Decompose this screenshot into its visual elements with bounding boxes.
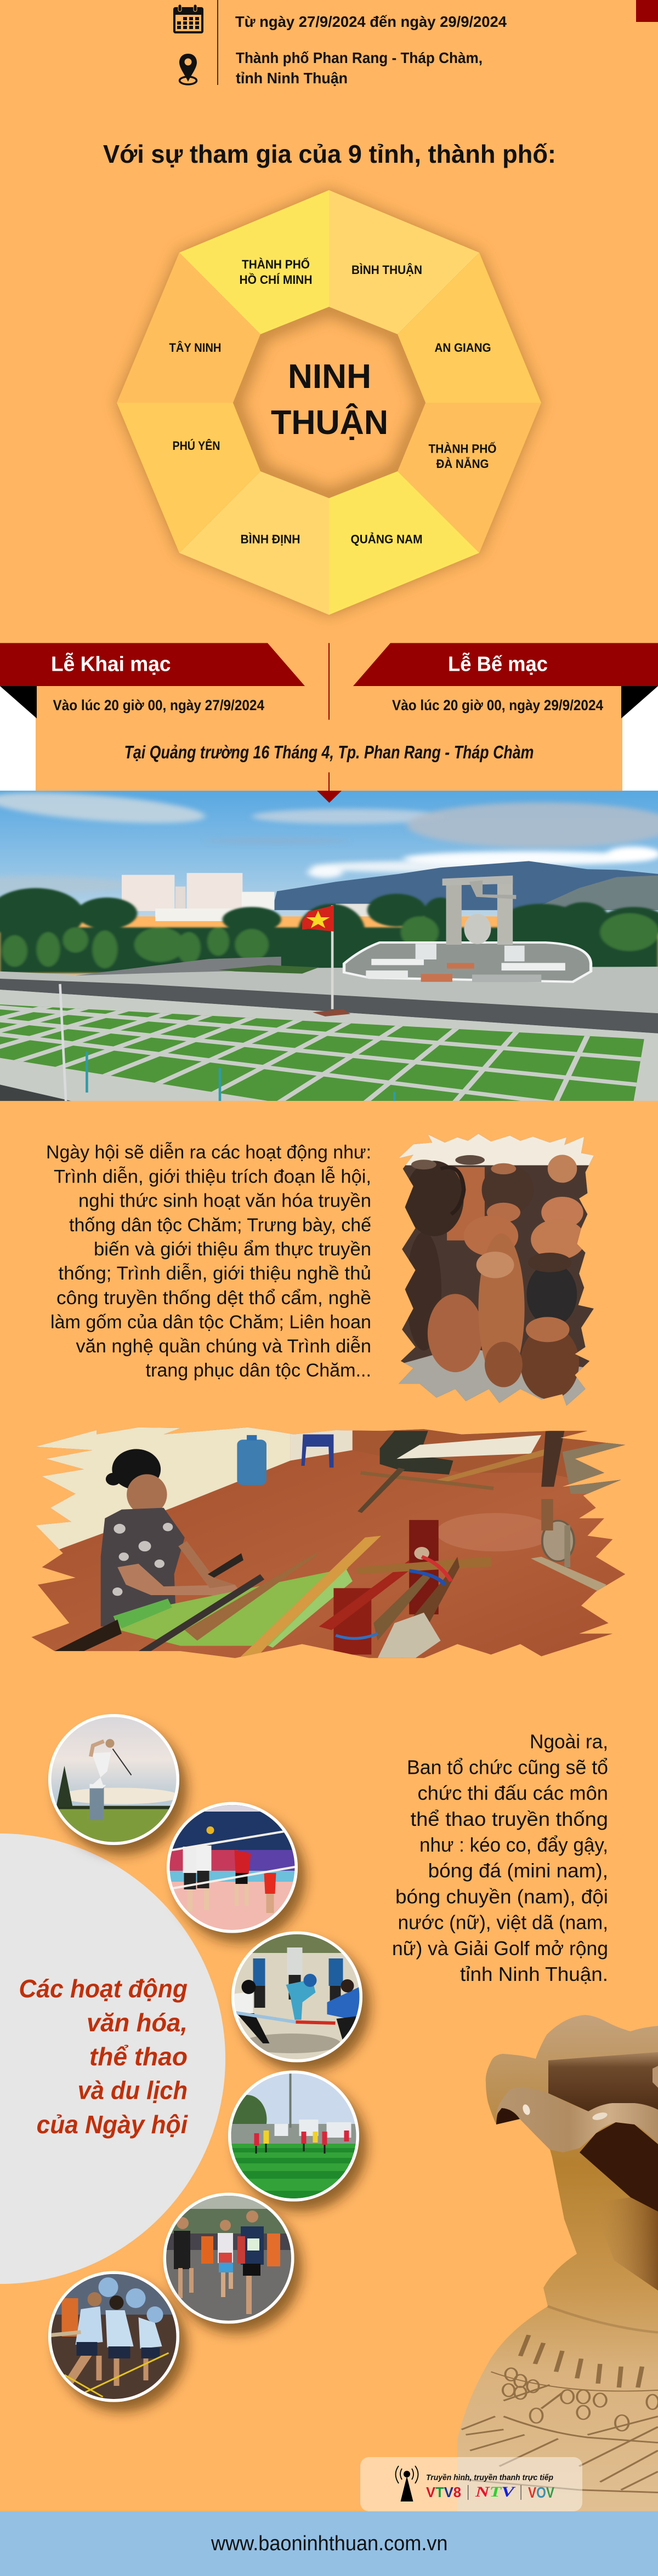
- banner: closing ceremony: Lễ Bế mạc: [448, 652, 548, 676]
- text: festival activities: biến và giới thiệu ẩm thực truyền: [94, 1239, 371, 1260]
- text: sports: thể thao truyền thống: [410, 1808, 608, 1830]
- text: festival activities: [46, 1142, 371, 1381]
- footer: www.baoninhthuan.com.vn: [211, 2532, 447, 2555]
- circle photo: golf: [48, 1714, 180, 1848]
- text: sports: Ban tổ chức cũng sẽ tổ: [407, 1756, 608, 1779]
- woman: [101, 1449, 248, 1626]
- grey circle backdrop: [0, 1834, 225, 2284]
- circle photo: pushing stick: [231, 1931, 363, 2063]
- opening time: Vào lúc 20 giờ 00, ngày 27/9/2024: [53, 697, 264, 713]
- text: festival activities: văn nghệ quần chúng và Trình diễn: [76, 1336, 371, 1357]
- segment: Thành phố Hồ Chí Minh: THÀNH PHỐ: [242, 257, 310, 271]
- spinning wheel: [531, 1499, 606, 1592]
- segment: Quảng Nam: QUẢNG NAM: [351, 533, 422, 546]
- segment: Đà Nẵng: THÀNH PHỐ: [429, 442, 497, 456]
- divider: [217, 0, 218, 85]
- text: festival activities: Ngày hội sẽ diễn ra các hoạt động như:: [46, 1142, 371, 1163]
- photo: Cham pottery: [394, 1130, 596, 1410]
- broadcast panel: [360, 2457, 582, 2511]
- heading: activities: Các hoạt động: [19, 1974, 188, 2003]
- place text: tỉnh Ninh Thuận: [236, 70, 348, 87]
- footer: [0, 2511, 658, 2576]
- text: sports: [392, 1730, 608, 1985]
- segment: An Giang: [398, 253, 541, 403]
- heading: activities: thể thao: [89, 2042, 188, 2071]
- segment: Bình Thuận: [329, 190, 479, 334]
- jar body: [457, 2015, 658, 2511]
- segment: Phú Yên: PHÚ YÊN: [172, 439, 220, 453]
- segment: Tây Ninh: [117, 253, 260, 403]
- background weaver and loom: [358, 1431, 629, 1513]
- clay jar image: [457, 2015, 658, 2511]
- circle photo: football: [227, 2070, 360, 2204]
- centre: Ninh Thuận: THUẬN: [271, 404, 388, 442]
- broadcast text: Truyền hình, truyền thanh trực tiếp: [426, 2474, 553, 2482]
- orange panel: [36, 686, 622, 791]
- segment: Bình Định: BÌNH ĐỊNH: [240, 533, 300, 546]
- text: festival activities: trang phục dân tộc Chăm...: [146, 1360, 371, 1381]
- text: sports: bóng chuyền (nam), đội: [395, 1885, 608, 1908]
- heading: activities: và du lịch: [78, 2076, 188, 2105]
- closing time: Vào lúc 20 giờ 00, ngày 29/9/2024: [392, 697, 603, 713]
- header: date and place: [173, 0, 507, 87]
- arrow down: [317, 773, 342, 803]
- segment: Tây Ninh: TÂY NINH: [169, 341, 222, 355]
- jar mouth interior: [548, 2052, 658, 2111]
- white side strips: [0, 686, 658, 791]
- text: sports: bóng đá (mini nam),: [428, 1859, 608, 1882]
- segment: Đà Nẵng: [398, 403, 541, 553]
- circle photo: volleyball: [167, 1802, 298, 1934]
- octagon diagram: [117, 190, 541, 615]
- jar engraved pattern: [462, 2306, 658, 2493]
- icon: calendar: [173, 4, 203, 33]
- monument: [344, 876, 591, 982]
- text: festival activities: thống; Trình diễn, giới thiệu nghề thủ: [58, 1263, 371, 1284]
- circle photo: tug of war: [48, 2271, 180, 2402]
- icon: antenna: [396, 2466, 418, 2501]
- photo: square with monument and flag: [0, 790, 658, 1101]
- logo: VOV: VOV: [528, 2484, 554, 2501]
- segment: Quảng Nam: [329, 471, 479, 615]
- segment: Bình Thuận: BÌNH THUẬN: [351, 263, 422, 277]
- text: festival activities: nghi thức sinh hoạt văn hóa truyền: [78, 1190, 371, 1211]
- logo: VTV8: VTV8: [426, 2484, 461, 2500]
- place text: Thành phố Phan Rang - Tháp Chàm,: [236, 49, 483, 66]
- circle photo: running: [163, 2192, 294, 2327]
- text: festival activities: Trình diễn, giới thiệu trích đoạn lễ hội,: [54, 1166, 371, 1187]
- banner: opening ceremony: Lễ Khai mạc: [51, 652, 171, 676]
- segment: Đà Nẵng: ĐÀ NẴNG: [436, 457, 489, 471]
- jar lip: [496, 2087, 658, 2152]
- text: sports: nữ) và Giải Golf mở rộng: [392, 1937, 608, 1960]
- text: sports: Ngoài ra,: [530, 1730, 608, 1752]
- neck shadow: [580, 2122, 658, 2212]
- heading: participants: Với sự tham gia của 9 tỉnh, thành phố:: [103, 140, 556, 168]
- logo: NTV: N TV: [475, 2484, 517, 2500]
- venue: Tại Quảng trường 16 Tháng 4, Tp. Phan Rang - Tháp Chàm: [124, 742, 534, 762]
- banner: closing ceremony: [353, 643, 658, 718]
- centre: Ninh Thuận: [233, 307, 426, 498]
- photo: weaving: [25, 1424, 629, 1661]
- text: sports: như : kéo co, đẩy gậy,: [419, 1834, 608, 1856]
- icon: location pin: [179, 54, 197, 84]
- left lobe cave: [496, 2108, 520, 2124]
- loom and cloth: [54, 1520, 492, 1658]
- corner accent: [636, 0, 658, 22]
- text: sports: tỉnh Ninh Thuận.: [460, 1963, 608, 1985]
- text: sports: nước (nữ), việt dã (nam,: [398, 1911, 608, 1934]
- panel: ceremonies: [0, 643, 658, 803]
- water bottle and stool: [237, 1435, 333, 1485]
- text: festival activities: làm gốm của dân tộc Chăm; Liên hoan: [50, 1312, 371, 1333]
- text: sports: chức thi đấu các môn: [418, 1782, 608, 1804]
- place text: [236, 49, 483, 87]
- segment: An Giang: AN GIANG: [434, 341, 491, 355]
- heading: activities: văn hóa,: [87, 2008, 188, 2037]
- segment: Bình Định: [179, 471, 329, 615]
- segment: Thành phố Hồ Chí Minh: HỒ CHÍ MINH: [239, 273, 313, 287]
- date text: Từ ngày 27/9/2024 đến ngày 29/9/2024: [235, 13, 507, 30]
- heading: activities: của Ngày hội: [37, 2110, 188, 2139]
- centre: Ninh Thuận: NINH: [288, 358, 371, 396]
- text: festival activities: công truyền thống dệt thổ cẩm, nghề: [56, 1288, 371, 1309]
- heading: activities: [19, 1974, 188, 2139]
- centre divider: [328, 643, 330, 720]
- segment: Thành phố Hồ Chí Minh: [179, 190, 329, 334]
- text: festival activities: thống dân tộc Chăm; Trưng bày, chế: [69, 1215, 371, 1236]
- segment: Phú Yên: [117, 403, 260, 553]
- lamps: [60, 984, 394, 1101]
- flag: [302, 905, 350, 1016]
- banner: opening ceremony: [0, 643, 305, 718]
